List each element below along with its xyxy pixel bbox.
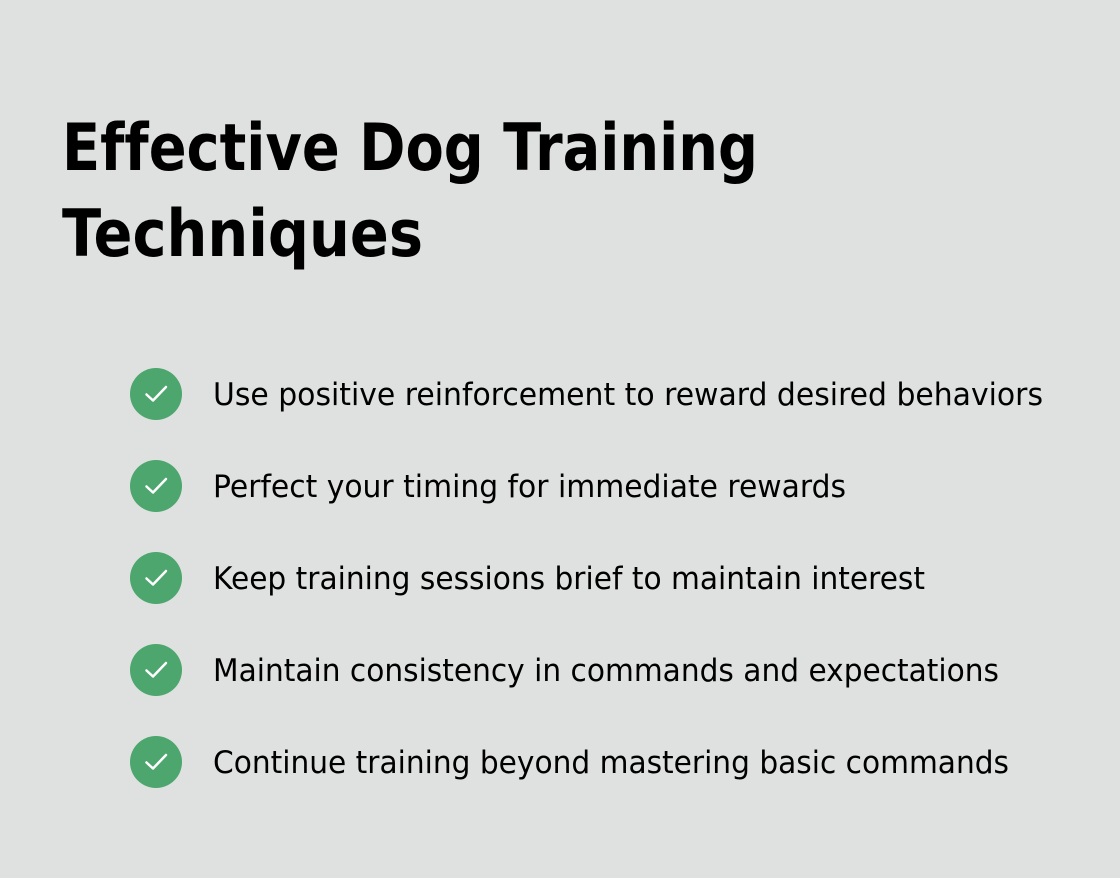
icon: check circle <box>130 368 182 420</box>
title <box>62 111 758 272</box>
icon: check circle <box>130 736 182 788</box>
icon: check circle <box>130 552 182 604</box>
item text: Maintain consistency in commands and expectations <box>213 653 999 689</box>
item text: Continue training beyond mastering basic commands <box>213 745 1009 781</box>
item: timing <box>130 460 846 512</box>
icon: check circle <box>130 460 182 512</box>
title: Effective Dog Training <box>62 111 758 186</box>
checklist <box>130 368 1043 788</box>
item: consistency <box>130 644 999 696</box>
item text: Perfect your timing for immediate rewards <box>213 469 846 505</box>
title: Techniques <box>62 197 423 272</box>
item text: Keep training sessions brief to maintain interest <box>213 561 925 597</box>
icon: check circle <box>130 644 182 696</box>
item: brief sessions <box>130 552 925 604</box>
item text: Use positive reinforcement to reward desired behaviors <box>213 377 1043 413</box>
item: positive reinforcement <box>130 368 1043 420</box>
item: continue training <box>130 736 1009 788</box>
